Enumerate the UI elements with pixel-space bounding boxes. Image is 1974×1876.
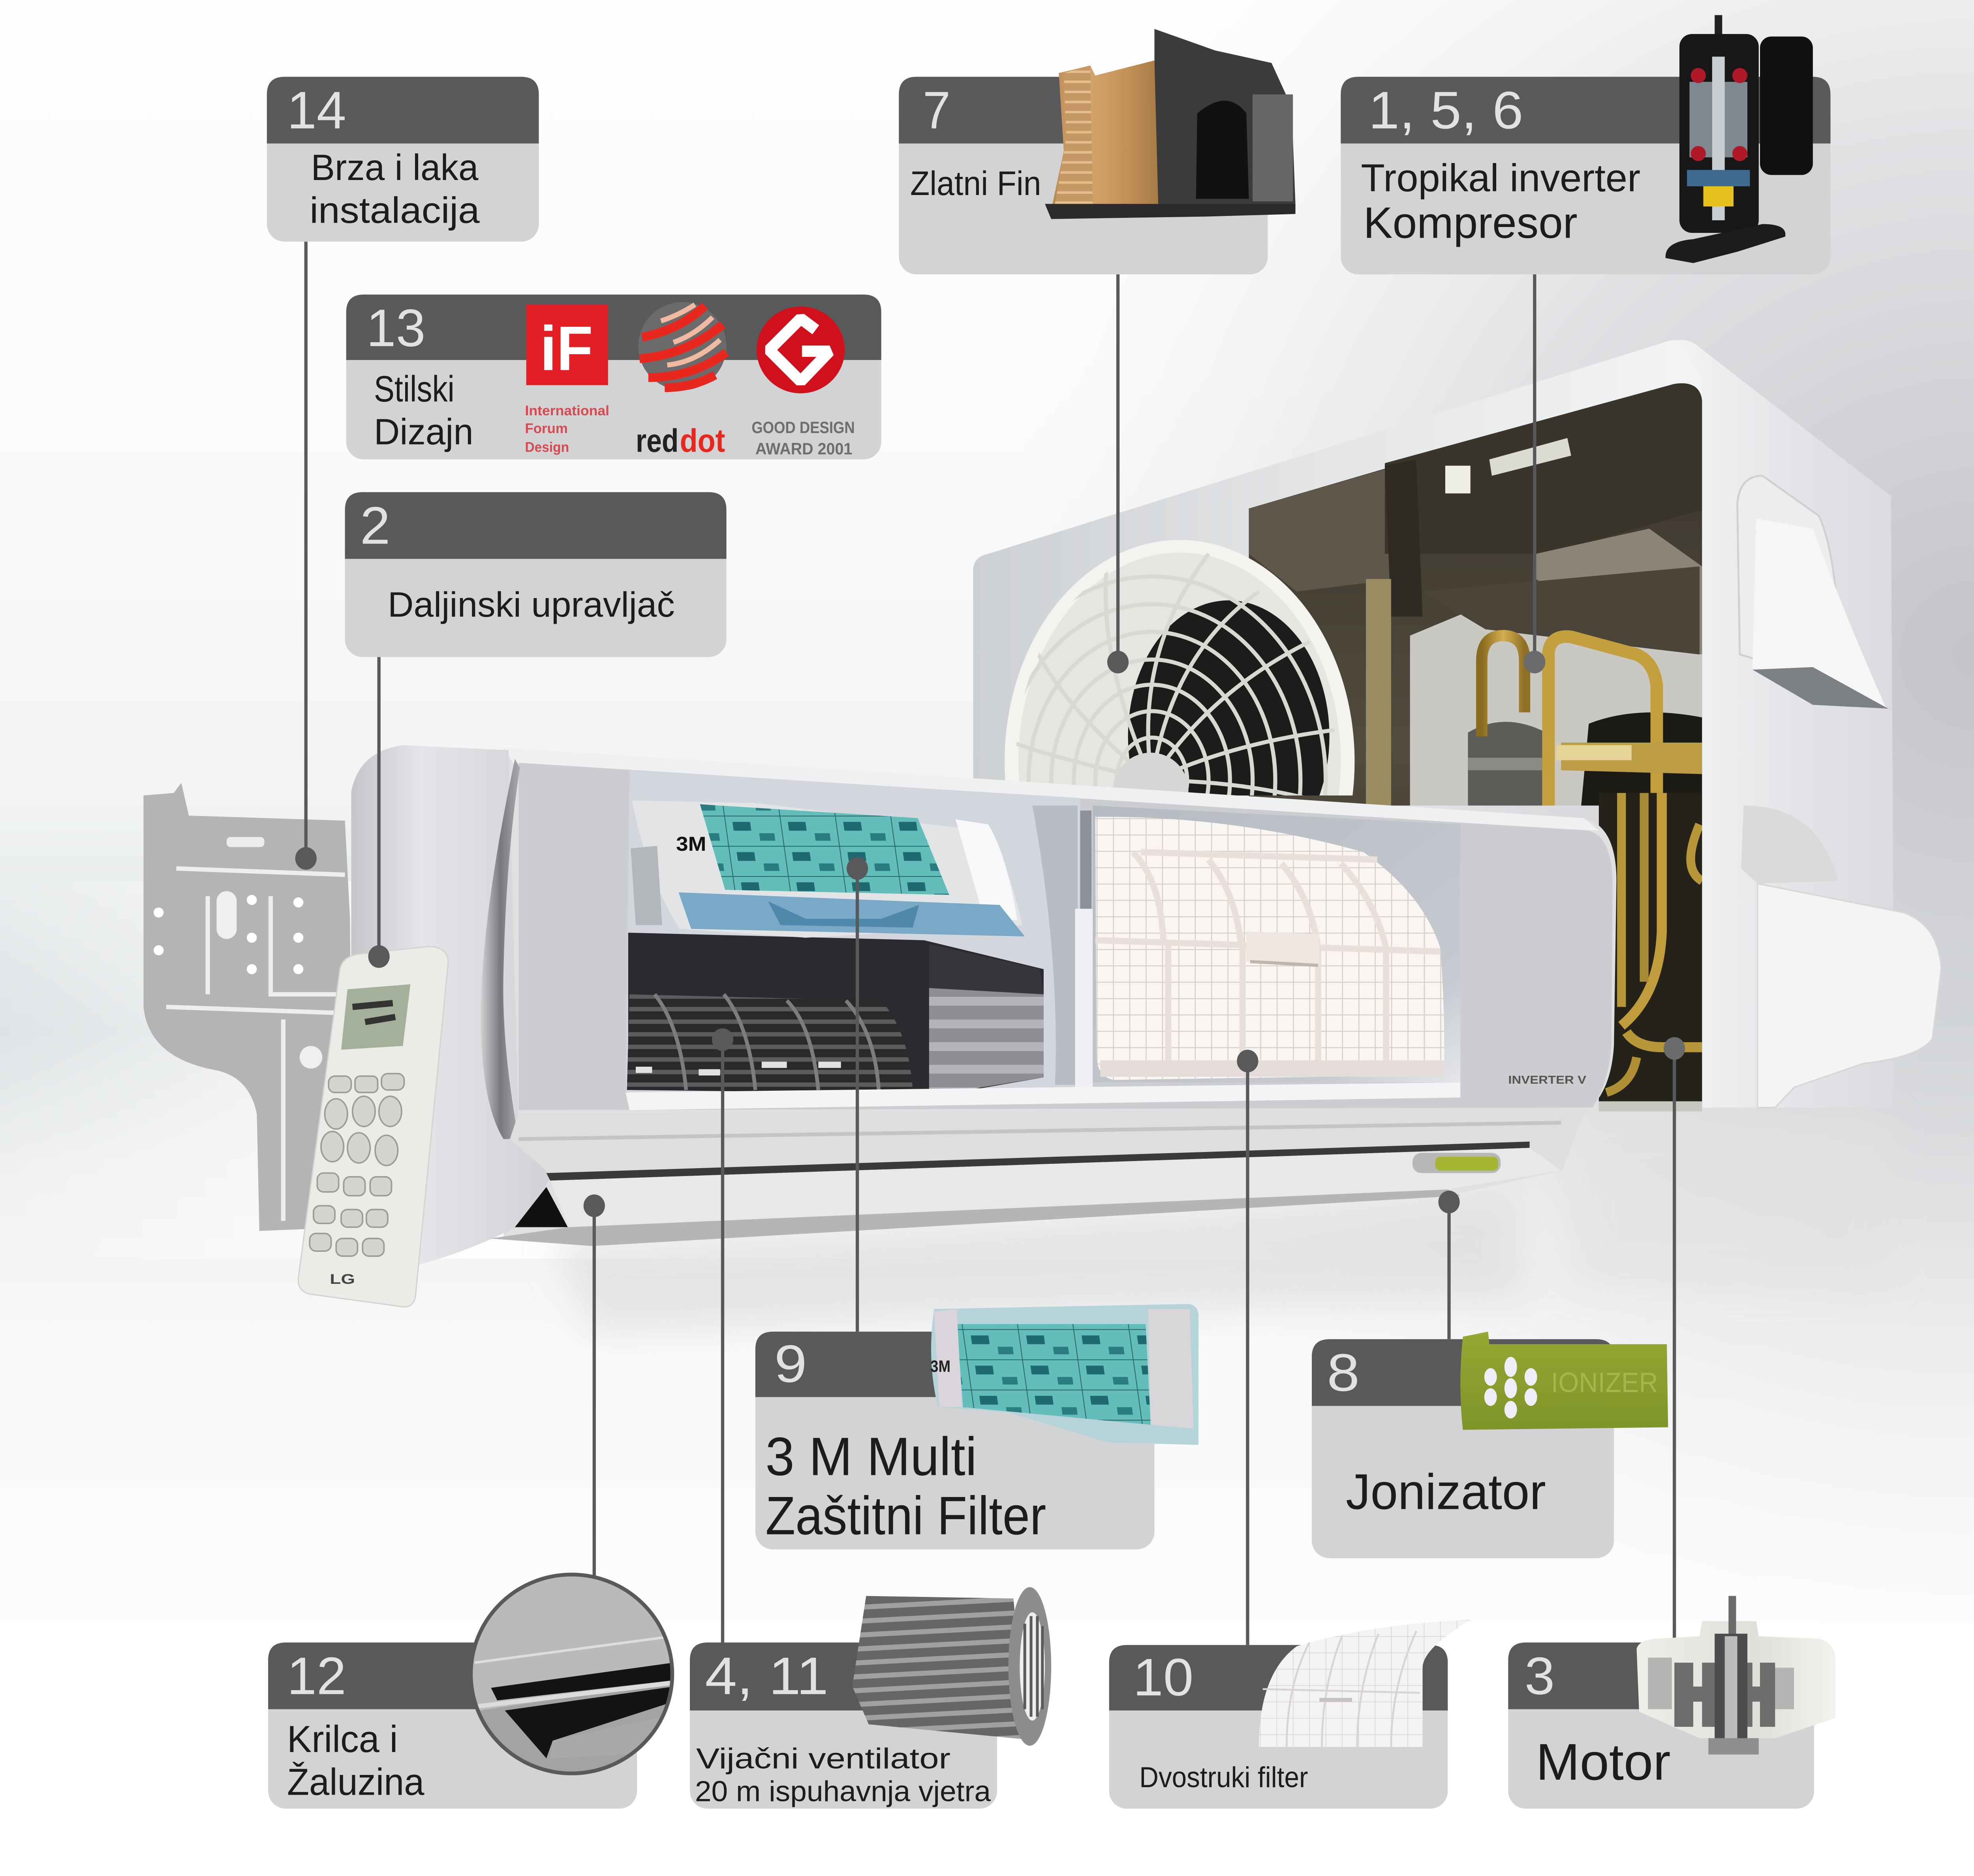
panel: 12 louvers xyxy=(268,1573,680,1808)
icon: reddot award: dot xyxy=(680,422,725,459)
leader line: 3 xyxy=(1664,1037,1685,1643)
outdoor front shell xyxy=(973,340,1702,805)
3M filter cartridge: 3M xyxy=(676,833,706,855)
panel: 4, 11 cross-flow fan: Vijačni ventilator xyxy=(696,1742,950,1775)
lower compartment with gold pipes xyxy=(1599,793,1702,1111)
panel: 14 installation xyxy=(267,77,539,242)
icon: ionizer module: IONIZER xyxy=(1551,1367,1658,1398)
panel: 9 3M filter: Zaštitni Filter xyxy=(765,1486,1046,1546)
left end cap xyxy=(351,745,550,1265)
panel: 3 motor: Motor xyxy=(1536,1733,1671,1791)
internal structure xyxy=(1249,384,1702,805)
lower white ledge xyxy=(626,1082,1460,1110)
panel: 1, 5, 6 compressor: Tropikal inverter xyxy=(1361,156,1640,200)
panel: 8 ionizer: 8 xyxy=(1327,1343,1360,1402)
panel: 2 remote: 2 xyxy=(360,496,390,555)
outdoor interior opening xyxy=(1249,383,1702,1108)
indoor unit xyxy=(351,745,1617,1265)
panel: 9 3M filter: 3 M Multi xyxy=(765,1427,977,1487)
slot xyxy=(547,1142,1530,1181)
reflection of indoor unit on floor xyxy=(554,1120,1888,1332)
leader line: 1, 5, 6 xyxy=(1524,274,1545,673)
leader line: 9 xyxy=(847,857,868,1332)
icon: iF award: iF xyxy=(540,313,593,383)
icon: 3M filter xyxy=(930,1304,1198,1445)
panel: 13 design awards: 13 xyxy=(366,299,426,358)
panel: 10 dual filter: Dvostruki filter xyxy=(1139,1761,1308,1793)
leader line: 2 xyxy=(368,657,390,968)
leader line: 14 xyxy=(295,242,317,870)
panel: 14 installation: instalacija xyxy=(310,189,480,231)
lower handle box xyxy=(1758,884,1941,1108)
icon: reddot award: red xyxy=(636,422,678,459)
icon: ionizer module xyxy=(1460,1332,1668,1430)
leader line: 4, 11 xyxy=(712,1028,733,1643)
panel: 1, 5, 6 compressor: 1, 5, 6 xyxy=(1369,81,1523,140)
panel: 14 installation: 14 xyxy=(287,81,346,140)
panel: 8 ionizer xyxy=(1312,1332,1668,1558)
ionizer indicator xyxy=(1412,1153,1501,1173)
top white band xyxy=(503,748,1599,831)
icon: iF award xyxy=(525,305,609,455)
panel: 12 louvers: 12 xyxy=(287,1647,346,1705)
wall mounting plate xyxy=(143,783,353,1231)
outdoor unit xyxy=(973,340,1941,1111)
icon: 3M filter: 3M xyxy=(930,1357,950,1375)
louver xyxy=(490,1148,1561,1246)
panel: 1, 5, 6 compressor xyxy=(1341,15,1831,274)
icon: condenser assembly xyxy=(1045,29,1296,219)
panel: 7 golden fin: Zlatni Fin xyxy=(910,165,1041,203)
panel: 10 dual filter xyxy=(1109,1620,1471,1808)
chrome strip xyxy=(481,759,520,1139)
icon: iF award: International xyxy=(525,403,609,418)
panel: 2 remote: Daljinski upravljač xyxy=(388,585,675,624)
left opening xyxy=(626,770,1093,1095)
3M filter cartridge xyxy=(631,801,1025,938)
remote control: LG xyxy=(330,1272,355,1287)
panel: 4, 11 cross-flow fan xyxy=(690,1587,1051,1808)
icon: filter xyxy=(1259,1620,1471,1747)
panel: 4, 11 cross-flow fan: 20 m ispuhavnja vjetra xyxy=(695,1775,991,1807)
main body xyxy=(503,748,1617,1240)
leader line: 7 xyxy=(1107,274,1129,673)
panel: 8 ionizer: Jonizator xyxy=(1346,1464,1546,1520)
icon: good design award: AWARD 2001 xyxy=(755,439,852,458)
panel: 14 installation: Brza i laka xyxy=(311,147,479,188)
front panel xyxy=(519,763,1613,1110)
panel: 3 motor xyxy=(1508,1596,1835,1808)
panel: 9 3M filter xyxy=(755,1304,1198,1550)
icon: reddot award xyxy=(636,302,727,459)
inverter badge: INVERTER V xyxy=(1508,1074,1586,1086)
panel: 13 design awards xyxy=(346,295,881,460)
panel: 12 louvers: Žaluzina xyxy=(287,1761,424,1803)
panel: 3 motor: 3 xyxy=(1525,1647,1555,1705)
lower band xyxy=(510,1110,1589,1177)
outdoor fan grille xyxy=(1005,540,1354,795)
panel: 4, 11 cross-flow fan: 4, 11 xyxy=(705,1647,828,1705)
panel: 9 3M filter: 9 xyxy=(774,1335,807,1394)
outdoor side panel xyxy=(1679,340,1895,1108)
leader line: 8 xyxy=(1438,1191,1460,1339)
black fan chamber xyxy=(627,932,1044,1094)
icon: magnified louver xyxy=(466,1573,680,1775)
panel: 7 golden fin: 7 xyxy=(923,81,950,140)
panel: 12 louvers: Krilca i xyxy=(287,1718,398,1760)
pre-filter xyxy=(1095,817,1444,1080)
icon: iF award: Design xyxy=(525,440,569,455)
panel: 10 dual filter: 10 xyxy=(1133,1648,1193,1707)
icon: rotary compressor cutaway xyxy=(1666,15,1813,263)
right opening xyxy=(1093,805,1460,1082)
icon: motor cutaway xyxy=(1637,1596,1835,1754)
upper handle xyxy=(1737,476,1888,709)
panel: 13 design awards: Dizajn xyxy=(374,411,473,452)
panel: 2 remote xyxy=(345,492,727,657)
panel: 7 golden fin xyxy=(899,29,1296,274)
icon: good design award: GOOD DESIGN xyxy=(751,418,855,437)
leader line: 12 xyxy=(584,1195,605,1576)
panel: 13 design awards: Stilski xyxy=(374,368,455,409)
remote control xyxy=(298,947,448,1307)
leader line: 10 xyxy=(1237,1050,1258,1645)
panel: 1, 5, 6 compressor: Kompresor xyxy=(1364,198,1578,248)
icon: good design award xyxy=(751,306,855,458)
icon: fan cylinder xyxy=(852,1587,1051,1746)
icon: iF award: Forum xyxy=(525,421,568,436)
